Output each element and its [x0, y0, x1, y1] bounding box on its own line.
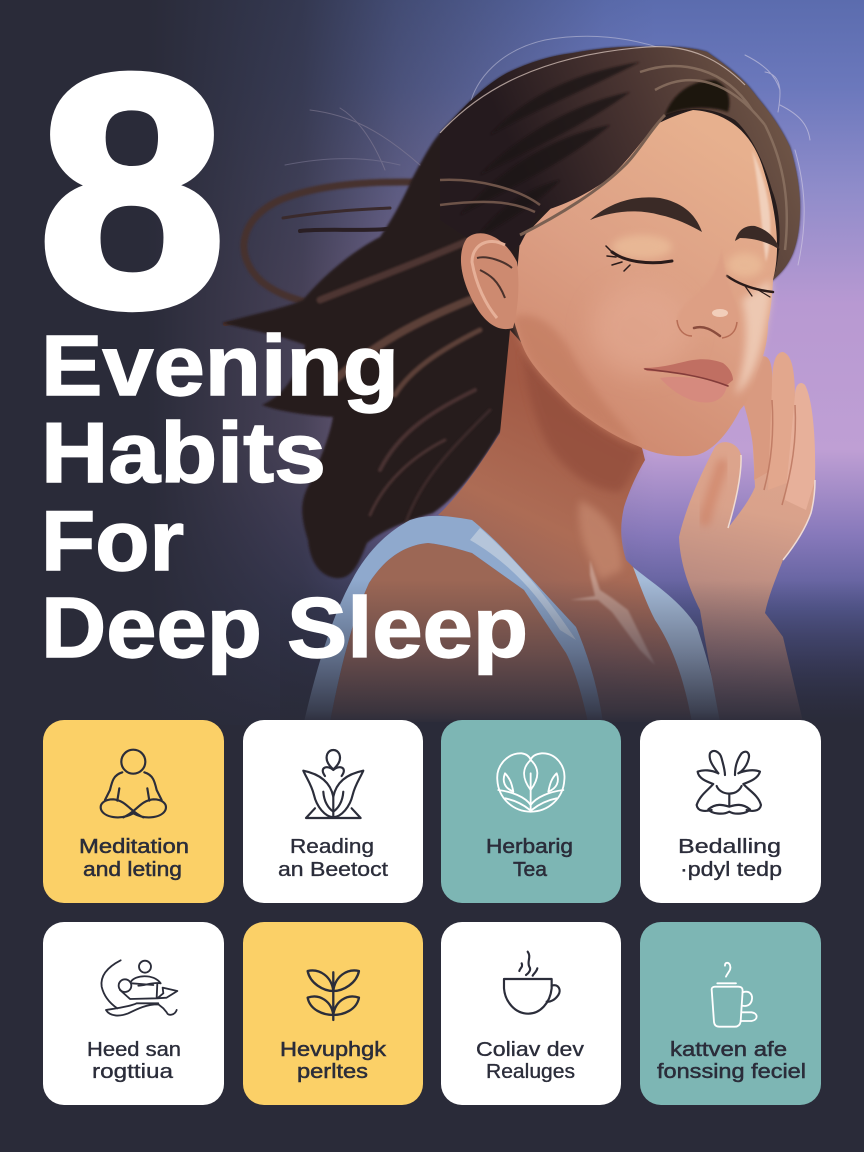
label: Heed san	[87, 1039, 181, 1061]
hand	[679, 352, 815, 722]
label: Reading	[290, 836, 374, 858]
title line: Deep Sleep: Deep Sleep	[41, 581, 528, 676]
panel: herbal tea card	[441, 720, 621, 903]
label	[476, 1039, 584, 1083]
label: rogttiua	[92, 1061, 174, 1083]
label: Bedalling	[678, 836, 781, 858]
shadow under jaw	[523, 350, 640, 492]
far cheek light	[735, 280, 771, 395]
illustration: woman with eyes closed	[222, 36, 864, 725]
forehead rim light	[752, 150, 770, 262]
neck and chest	[438, 330, 700, 722]
label: Tea	[513, 859, 548, 881]
label	[678, 836, 782, 881]
icon: lotus figure	[303, 750, 363, 818]
fine flyaway strands	[285, 36, 810, 265]
label	[657, 1039, 806, 1083]
bottom fade	[280, 580, 864, 725]
icon: steaming mug	[712, 963, 757, 1027]
icon: steaming cup	[504, 952, 560, 1014]
panel: mug card	[640, 922, 821, 1105]
panel: herb card	[243, 922, 423, 1105]
flowing hair loop	[225, 182, 500, 330]
label	[280, 1039, 387, 1083]
label	[278, 836, 389, 881]
label: and leting	[83, 859, 182, 881]
title line: Habits: Habits	[41, 406, 326, 501]
title line: Evening: Evening	[41, 319, 399, 414]
hair texture strands	[320, 240, 490, 525]
title line: For: For	[41, 494, 184, 589]
label	[79, 836, 189, 881]
icon: abstract relaxing figure	[697, 751, 761, 814]
panel: bedding card	[640, 720, 821, 903]
icon: meditating person	[101, 750, 166, 817]
collarbone highlights	[570, 560, 655, 665]
label: Meditation	[79, 836, 189, 858]
label: Herbarig	[486, 836, 573, 858]
dark tapered hair streaks	[460, 62, 640, 240]
panel: reading card	[243, 720, 423, 903]
eyelids	[612, 235, 763, 277]
shoulder	[330, 543, 597, 722]
cheek light	[590, 285, 690, 375]
label	[486, 836, 573, 881]
label: Coliav dev	[476, 1039, 584, 1061]
panel: cup card	[441, 922, 621, 1105]
left eye lashes	[606, 246, 672, 271]
icon: leaf heart	[497, 753, 564, 812]
nose	[677, 247, 739, 338]
panel: meditation card	[43, 720, 224, 903]
label: kattven afe	[670, 1039, 787, 1061]
panel: head massage card	[43, 922, 224, 1105]
hair back mass	[222, 47, 800, 578]
top hair	[440, 47, 800, 280]
icon: sprig	[308, 971, 359, 1020]
label: an Beetoct	[278, 859, 389, 881]
right eye lashes	[727, 276, 773, 297]
label: Hevuphgk	[280, 1039, 387, 1061]
jaw shading	[513, 315, 640, 447]
icon: massage scene	[101, 960, 177, 1016]
label	[87, 1039, 181, 1083]
ear	[461, 233, 518, 329]
face	[513, 110, 777, 456]
chest highlight	[579, 500, 622, 580]
label: fonssing feciel	[657, 1061, 806, 1083]
big number 8: 8	[38, 6, 226, 375]
right eyebrow	[735, 226, 780, 250]
title	[38, 6, 528, 676]
lips	[643, 359, 733, 403]
left eyebrow	[590, 197, 702, 232]
label: Realuges	[486, 1061, 575, 1083]
dress	[304, 516, 721, 722]
label: perltes	[297, 1061, 368, 1083]
temple skin patch	[553, 143, 605, 187]
label: ·pdyl tedp	[680, 859, 782, 881]
